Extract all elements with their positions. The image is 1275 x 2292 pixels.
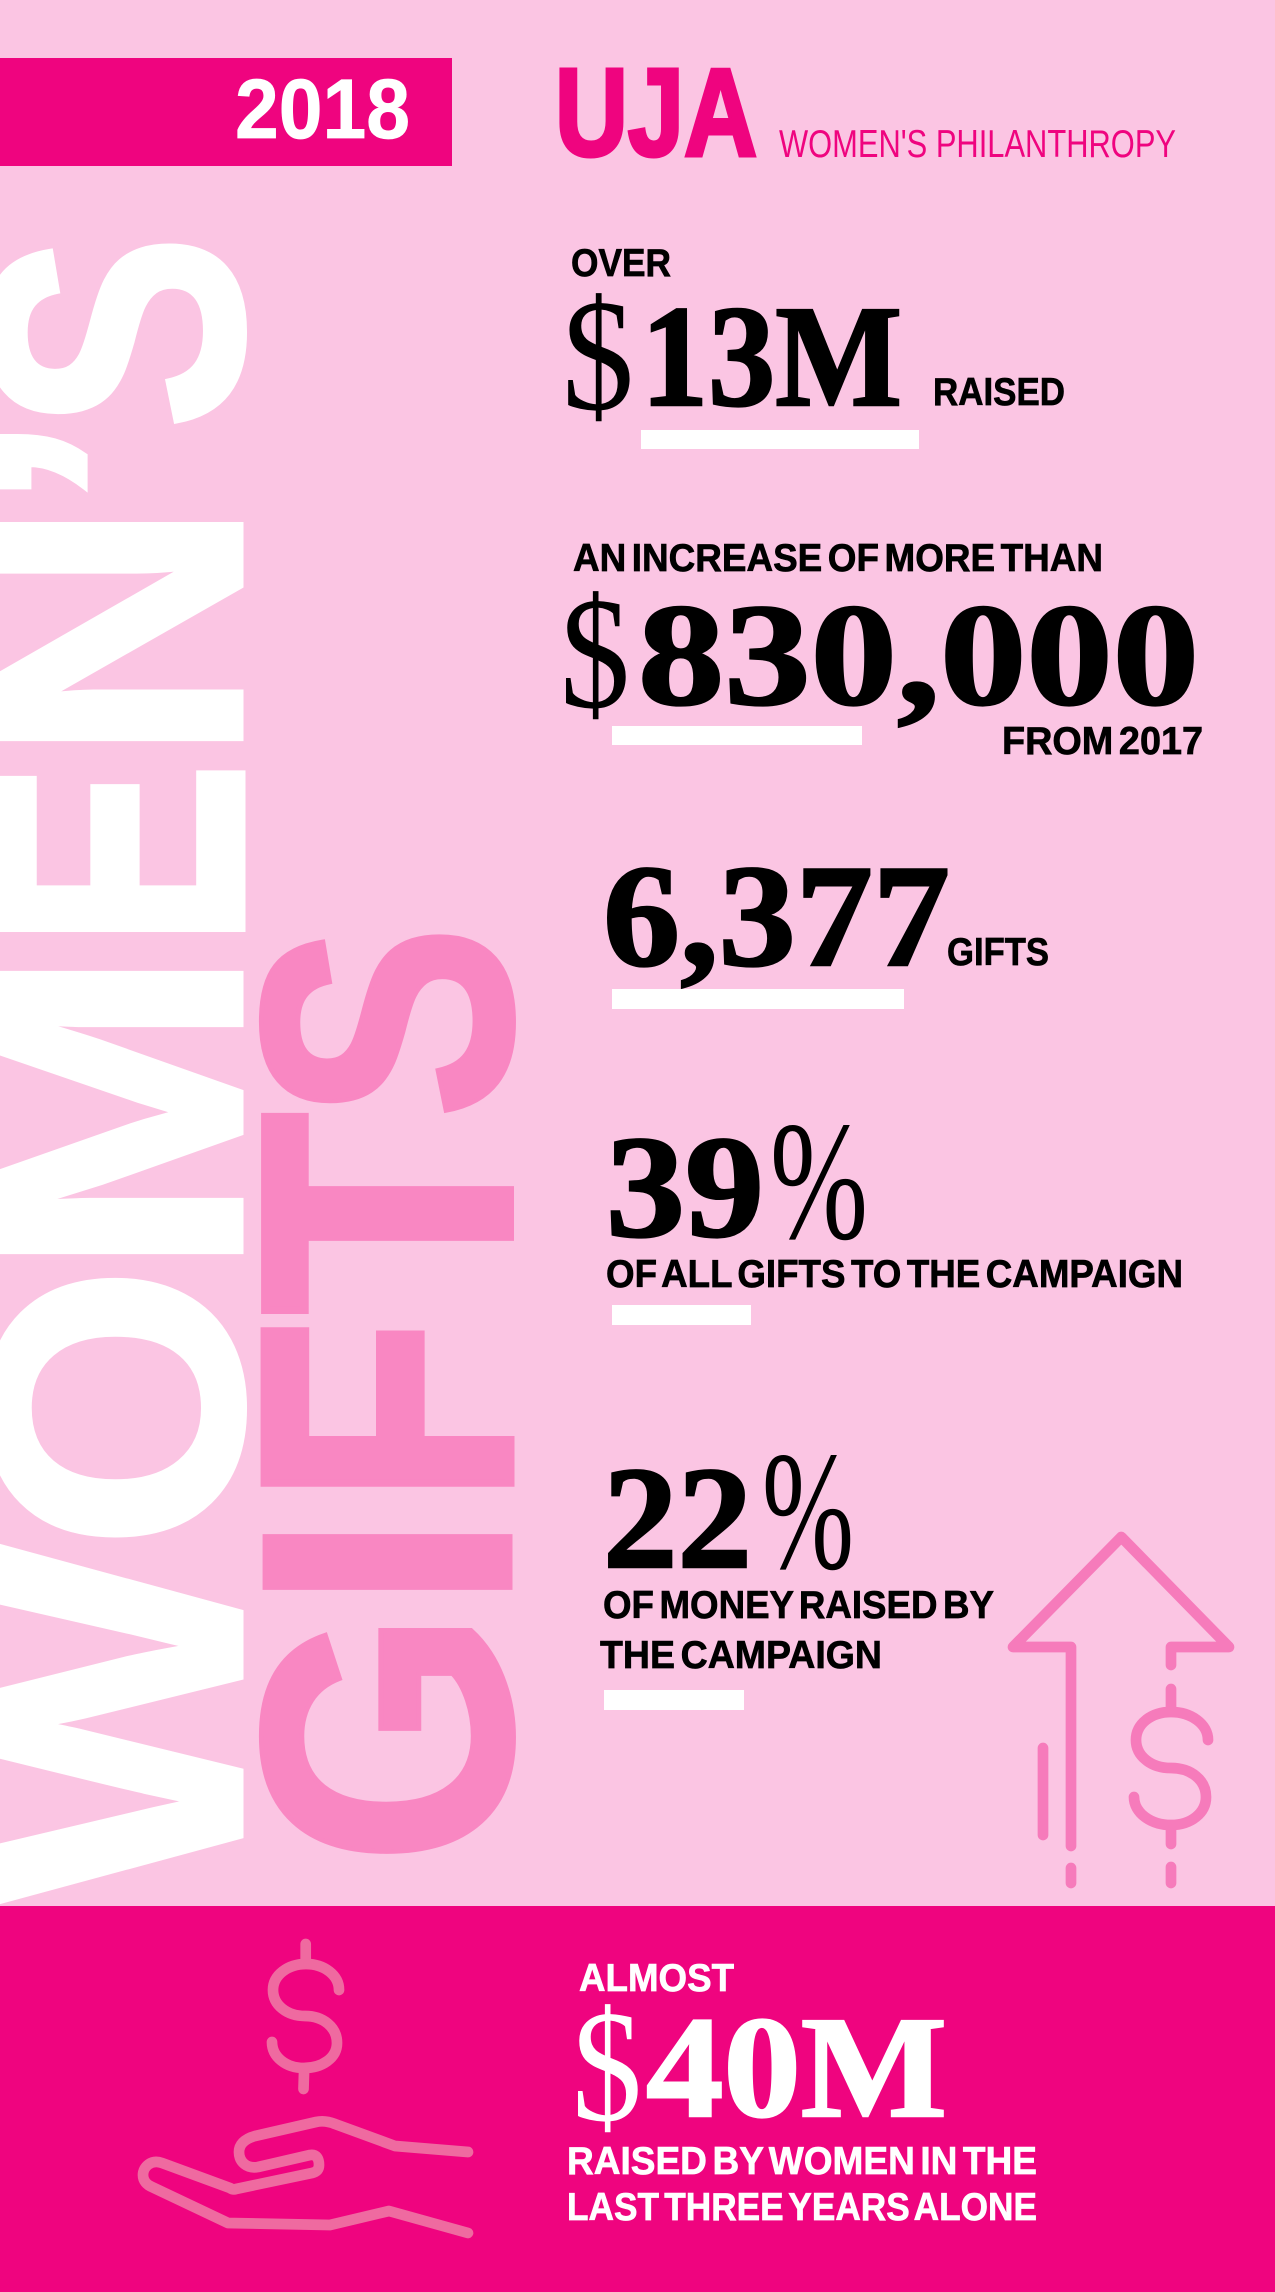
stat: 39% of all gifts: OF ALL GIFTS TO THE CAMPAIGN (606, 1253, 1183, 1296)
vertical heading: GIFTS: I (189, 1513, 586, 1611)
stat: increase of $830,000 from 2017: $ (560, 564, 630, 742)
stat: over $13M raised: RAISED (933, 371, 1065, 414)
stat: 22% of money raised: THE CAMPAIGN (600, 1634, 882, 1677)
stat: 39% of all gifts (606, 1087, 1183, 1325)
stat: almost $40M: RAISED BY WOMEN IN THE (567, 2140, 1037, 2183)
stat: over $13M raised: 13M (641, 277, 902, 437)
stat: 6,377 gifts: 6,377 (603, 835, 950, 997)
stat: almost $40M: LAST THREE YEARS ALONE (567, 2186, 1037, 2229)
vertical heading: GIFTS (189, 925, 586, 1865)
logo: UJA Women's Philanthropy: WOMEN'S PHILANTHROPY (779, 123, 1176, 166)
vertical heading: GIFTS: T (189, 1113, 586, 1314)
stat: 39% of all gifts: 39 (606, 1106, 764, 1268)
icon: arrow with dollar sign (1013, 1537, 1229, 1883)
stat: over $13M raised: $ (562, 266, 634, 444)
stat: 22% of money raised (600, 1417, 994, 1710)
stat: 6,377 gifts: GIFTS (947, 931, 1049, 974)
vertical heading: WOMEN'S (0, 234, 318, 1904)
stat: 22% of money raised: 22 (603, 1437, 752, 1599)
stat: over $13M raised (562, 242, 1065, 449)
stat: increase of $830,000 from 2017 (560, 537, 1203, 763)
stat: 22% of money raised: % (762, 1417, 854, 1605)
stat: 39% of all gifts: % (770, 1087, 868, 1275)
year banner: 2018 (235, 62, 410, 156)
logo: UJA Women's Philanthropy: UJA (555, 44, 757, 182)
stat: over $13M raised: OVER (571, 242, 671, 285)
icon: hand receiving dollar (143, 1944, 468, 2233)
vertical heading: GIFTS: S (189, 925, 586, 1119)
logo: UJA Women's Philanthropy (555, 44, 1176, 182)
stat: almost $40M: ALMOST (579, 1957, 734, 2000)
stat: almost $40M (567, 1957, 1037, 2229)
year banner (0, 58, 452, 166)
vertical heading: GIFTS: G (189, 1610, 586, 1865)
footer band (0, 1906, 1275, 2292)
stat: 6,377 gifts (603, 835, 1049, 1009)
stat: almost $40M: 40M (646, 1988, 947, 2148)
vertical heading: GIFTS: F (189, 1320, 586, 1503)
stat: increase of $830,000 from 2017: 830,000 (638, 574, 1199, 736)
stat: increase of $830,000 from 2017: AN INCREASE OF MORE THAN (573, 537, 1103, 580)
stat: almost $40M: $ (572, 1977, 642, 2155)
stat: increase of $830,000 from 2017: FROM 2017 (1002, 720, 1203, 763)
stat: 22% of money raised: OF MONEY RAISED BY (603, 1584, 994, 1627)
